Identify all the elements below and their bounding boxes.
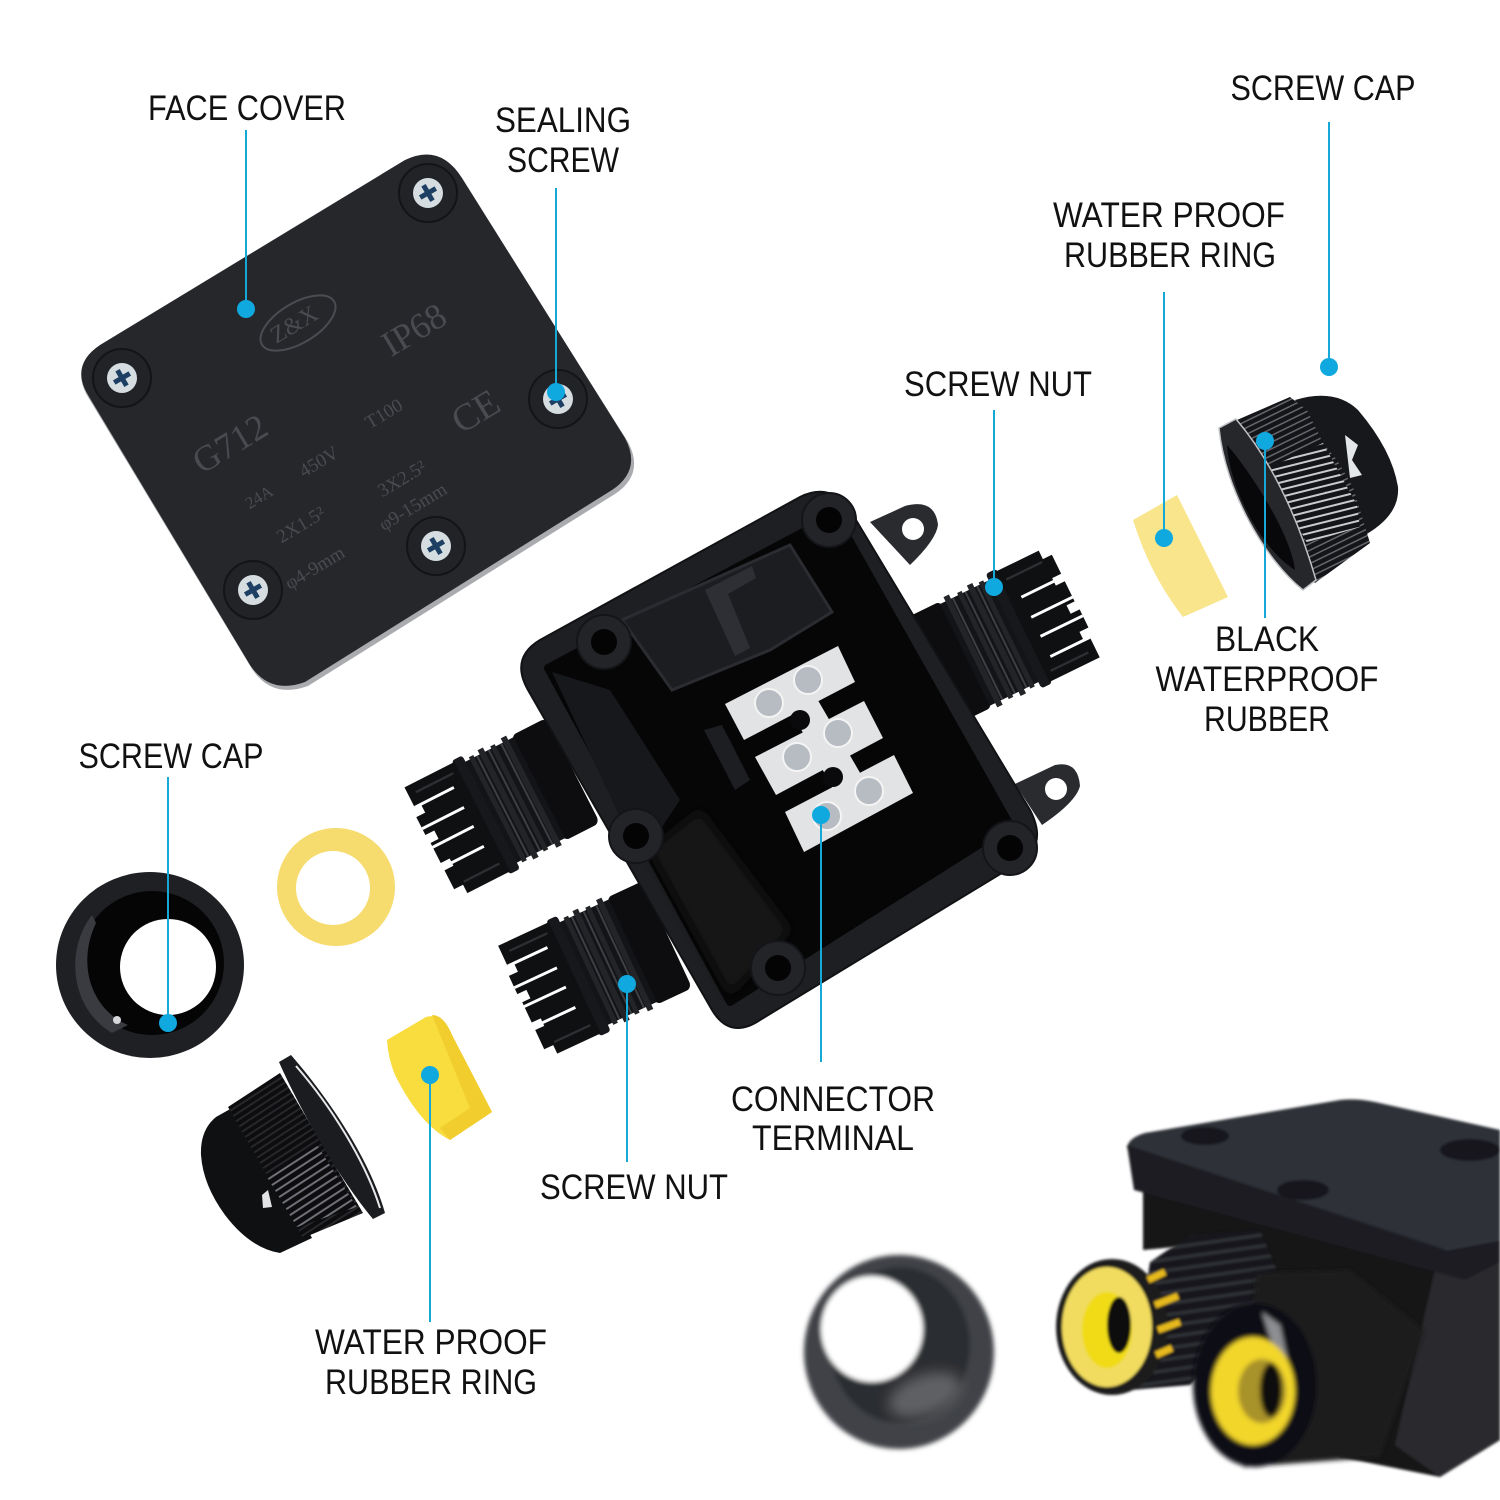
label: top right screw cap [1230, 69, 1416, 376]
label: sealing screw: SCREW [507, 141, 619, 180]
label: connector terminal: CONNECTOR [731, 1080, 935, 1119]
label: black waterproof rubber: WATERPROOF [1156, 660, 1378, 699]
label: left screw cap: SCREW CAP [78, 737, 264, 776]
photo: left yellow rubber ring [277, 828, 395, 946]
embossed markings: T100 [362, 395, 407, 434]
label: top water proof rubber ring [1053, 196, 1285, 547]
label: left screw cap [78, 737, 264, 1032]
mounting tabs [870, 504, 1080, 825]
embossed markings: 24A [242, 481, 277, 513]
embossed markings: φ4-9mm [282, 542, 349, 594]
label: sealing screw [495, 101, 631, 401]
embossed markings: 450V [296, 442, 343, 482]
label: connector terminal [731, 806, 935, 1158]
embossed markings: 3X2.5² [374, 457, 430, 502]
embossed markings: IP68 [374, 295, 453, 364]
label: lower water proof rubber ring: RUBBER RING [325, 1363, 537, 1402]
photo: left screw nut [401, 714, 602, 900]
label: lower screw nut: SCREW NUT [540, 1168, 728, 1207]
photo: right screw nut [903, 544, 1103, 729]
label: face cover: FACE COVER [148, 89, 346, 128]
photo: right screw cap [1219, 396, 1398, 590]
label: lower screw nut [540, 975, 728, 1207]
yellow gland [1056, 1230, 1285, 1395]
photo: right yellow rubber ring [1133, 495, 1228, 617]
photo: lower yellow rubber ring [387, 1015, 492, 1140]
label: top water proof rubber ring: WATER PROOF [1053, 196, 1285, 235]
label: top water proof rubber ring: RUBBER RING [1064, 236, 1276, 275]
embossed markings: G712 [185, 406, 274, 481]
photo: lower screw cap [201, 1055, 385, 1253]
photo: left screw cap ring [56, 872, 244, 1058]
moulded interior detail [552, 545, 832, 995]
photo: blurred assembled box [804, 1099, 1500, 1477]
embossed markings: Z&X [266, 301, 323, 349]
label: lower water proof rubber ring: WATER PROOF [315, 1323, 547, 1362]
label: black waterproof rubber [1156, 432, 1378, 739]
label: connector terminal: TERMINAL [752, 1119, 914, 1158]
label: top screw nut [904, 365, 1092, 596]
embossed markings: φ9-15mm [375, 479, 451, 536]
screws [399, 164, 457, 222]
embossed markings: CE [444, 381, 507, 442]
photo: lower screw nut [494, 877, 694, 1060]
box body and lid [1127, 1099, 1500, 1477]
connector terminal [725, 646, 913, 852]
photo: face cover [81, 154, 634, 690]
label: top screw nut: SCREW NUT [904, 365, 1092, 404]
label: face cover [148, 89, 346, 318]
label: top right screw cap: SCREW CAP [1230, 69, 1416, 108]
photo: junction box [521, 492, 1080, 1028]
label: sealing screw: SEALING [495, 101, 631, 140]
label: black waterproof rubber: RUBBER [1204, 700, 1330, 739]
loose screw cap [804, 1255, 994, 1449]
label: lower water proof rubber ring [315, 1066, 547, 1402]
label: black waterproof rubber: BLACK [1215, 620, 1319, 659]
black gland with yellow insert [1193, 1270, 1424, 1467]
embossed markings: 2X1.5² [273, 503, 329, 548]
embossed markings [185, 284, 507, 594]
corner posts [802, 493, 856, 547]
